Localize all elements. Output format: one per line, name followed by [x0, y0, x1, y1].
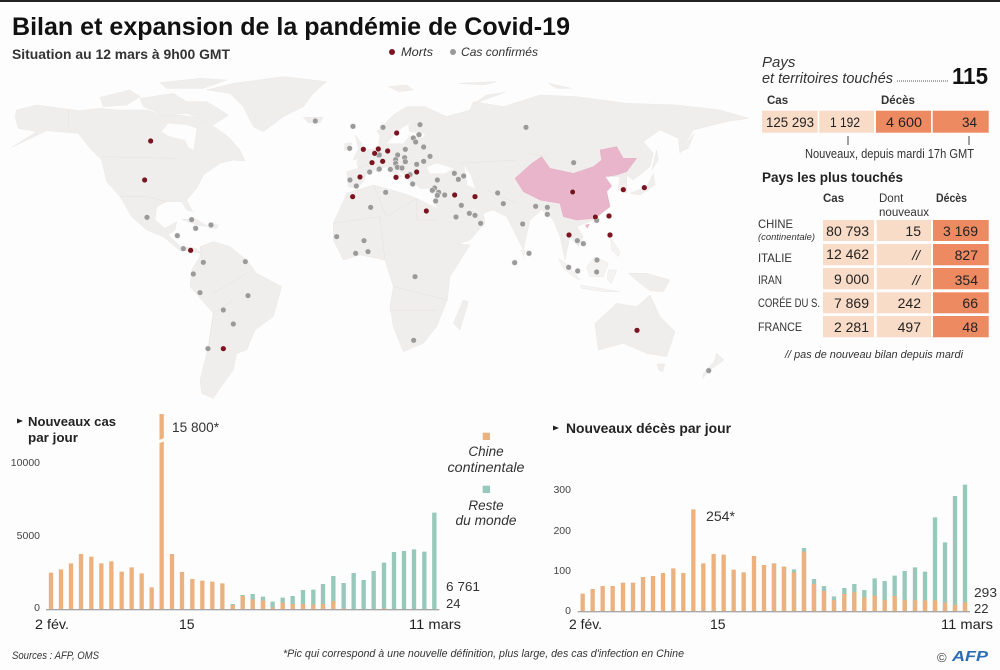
- x axis labels: 15: [710, 616, 726, 632]
- totals row: 125 293: [766, 114, 814, 130]
- y axis labels: [553, 484, 571, 617]
- footnote: *Pic qui correspond à une nouvelle définition, plus large, des cas d'infection en Chine: [283, 648, 684, 660]
- peak label: 15 800*: [172, 420, 220, 435]
- bars: deaths: [578, 485, 970, 612]
- title: Bilan et expansion de la pandémie de Covid-19: [12, 13, 570, 41]
- table values: 80 793: [826, 223, 869, 239]
- table values: 9 000: [834, 271, 869, 287]
- y axis labels: 10000: [11, 457, 40, 469]
- table values: 48: [962, 319, 978, 335]
- legend: rest of world: [456, 486, 516, 528]
- peak label: 254*: [706, 509, 736, 524]
- number: 115 countries: 115: [952, 63, 988, 89]
- column headers: Décès: [881, 95, 915, 107]
- column headers: Cas: [767, 95, 788, 107]
- bars: cases: [46, 414, 439, 610]
- country labels: IRAN: [758, 273, 782, 287]
- table values: 2 281: [834, 319, 869, 335]
- country labels: CHINE: [758, 217, 793, 231]
- y axis labels: [11, 457, 40, 614]
- table headers: nouveaux: [879, 207, 929, 219]
- table values: 3 169: [943, 223, 978, 239]
- heading: Pays les plus touchés: [762, 170, 903, 185]
- end values: 6 761: [446, 579, 480, 594]
- table values: 242: [898, 295, 921, 311]
- map points: confirmed cases: [144, 118, 711, 373]
- table headers: [823, 193, 967, 219]
- table values: [826, 223, 978, 335]
- x axis labels: 11 mars: [941, 616, 993, 632]
- table values: 66: [962, 295, 978, 311]
- map legend: Cas confirmés: [461, 45, 538, 59]
- end values: 293: [974, 585, 997, 600]
- map points: deaths: [142, 130, 647, 351]
- country labels: [758, 217, 820, 334]
- table values: //: [911, 247, 922, 263]
- panel: most affected countries: [758, 170, 989, 361]
- legend: rest of world: Reste: [468, 498, 504, 513]
- heading: countries and territories: et territoires touchés: [762, 70, 893, 87]
- chart heading: Nouveaux décès par jour: [566, 420, 732, 436]
- chart: new deaths per day: [553, 420, 997, 632]
- note: new since Tuesday: Nouveaux, depuis mardi 17h GMT: [805, 147, 974, 161]
- country labels: (continentale): [758, 232, 815, 243]
- y axis labels: 5000: [17, 530, 40, 542]
- end values: [446, 579, 480, 611]
- table values: 12 462: [826, 246, 869, 262]
- subtitle: Situation au 12 mars à 9h00 GMT: [12, 47, 231, 62]
- x axis labels: [35, 616, 461, 632]
- x axis labels: 11 mars: [409, 616, 461, 632]
- heading: countries and territories: Pays: [762, 54, 796, 71]
- table values: //: [911, 272, 922, 288]
- note: new since Tuesday: [805, 136, 974, 161]
- country labels: ITALIE: [758, 251, 792, 265]
- table footnote: // pas de nouveau bilan depuis mardi: [784, 349, 964, 361]
- x axis labels: 15: [179, 616, 195, 632]
- chart: new cases per day: [11, 414, 480, 632]
- country labels: CORÉE DU S.: [758, 295, 820, 310]
- table values: 15: [905, 223, 921, 239]
- chart heading: par jour: [28, 430, 78, 445]
- credit: AFP logo: AFP: [951, 648, 989, 665]
- y axis labels: 0: [34, 602, 40, 614]
- legend: mainland China: Chine: [468, 444, 504, 459]
- end values: 22: [974, 601, 988, 616]
- end values: 24: [446, 596, 460, 611]
- totals row: 1 192: [830, 114, 860, 130]
- table values: 7 869: [834, 295, 869, 311]
- legend: mainland China: [448, 433, 524, 475]
- end values: [974, 585, 997, 616]
- chart heading: [17, 414, 116, 445]
- chart legend: [448, 433, 524, 528]
- table values: 354: [955, 272, 978, 288]
- heading: countries and territories: [762, 54, 893, 87]
- legend: mainland China: continentale: [448, 460, 524, 475]
- map: Europe, Africa, Asia, Oceania: [333, 82, 748, 378]
- sources: Sources : AFP, OMS: [12, 650, 100, 662]
- y axis labels: 200: [553, 525, 571, 537]
- table cells: [823, 220, 989, 337]
- map: China highlighted: [515, 147, 637, 228]
- x axis labels: 2 fév.: [569, 616, 602, 632]
- credit: AFP logo: ©: [937, 650, 947, 665]
- table headers: Décès: [936, 193, 967, 205]
- y axis labels: 300: [553, 484, 571, 496]
- table headers: Cas: [823, 193, 844, 205]
- totals row: 4 600: [886, 114, 922, 130]
- totals row: [762, 111, 989, 133]
- credit: AFP logo: [937, 648, 989, 665]
- totals row: 34: [962, 114, 977, 130]
- y axis labels: 0: [565, 605, 571, 617]
- table headers: Dont: [879, 193, 904, 205]
- x axis labels: [569, 616, 993, 632]
- chart heading: Nouveaux cas: [28, 414, 116, 429]
- x axis labels: 2 fév.: [35, 616, 69, 632]
- y axis labels: 100: [553, 565, 571, 577]
- map: Americas: [12, 77, 327, 398]
- table values: 497: [898, 319, 921, 335]
- column headers: [767, 95, 915, 107]
- legend: rest of world: du monde: [456, 513, 516, 528]
- world map: [12, 77, 748, 398]
- map legend: Morts: [401, 45, 433, 59]
- country labels: FRANCE: [758, 320, 802, 334]
- map legend: [389, 45, 538, 59]
- panel: global totals: [762, 54, 989, 161]
- table values: 827: [955, 247, 978, 263]
